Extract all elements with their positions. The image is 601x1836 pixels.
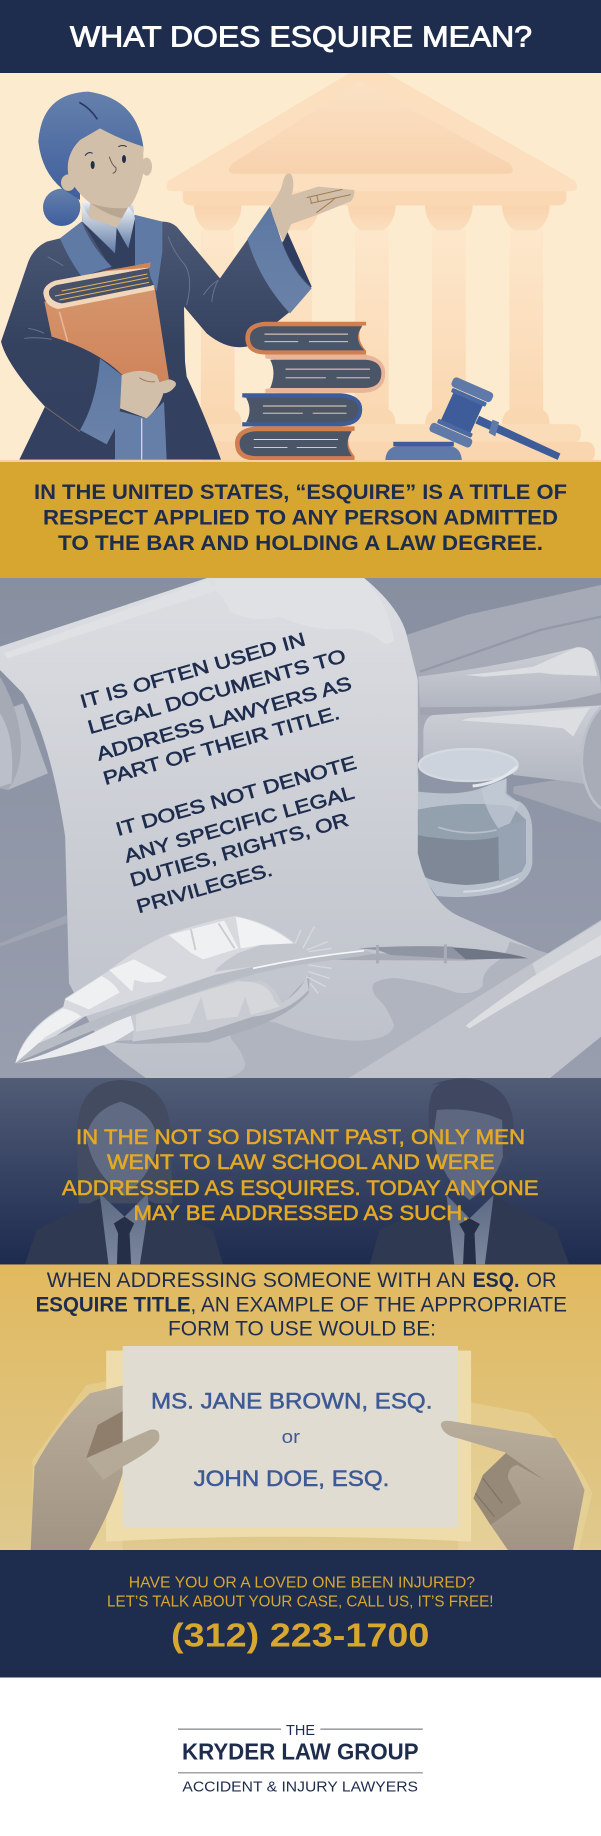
panel: call to action bbox=[0, 1550, 601, 1678]
panel: courthouse scene with attorney bbox=[0, 62, 601, 465]
left rolled scroll bbox=[0, 677, 67, 947]
call to action text: HAVE YOU OR A LOVED ONE BEEN INJURED? bbox=[129, 1574, 475, 1591]
right hand bbox=[441, 1421, 585, 1550]
history text: ADDRESSED AS ESQUIRES. TODAY ANYONE bbox=[62, 1176, 538, 1200]
intro text: , AN EXAMPLE OF THE APPROPRIATE bbox=[190, 1294, 567, 1316]
panel: history of the title bbox=[0, 1078, 601, 1265]
background scrolls and ink bottle bbox=[407, 585, 601, 897]
hand glow and back paper bbox=[33, 1351, 592, 1550]
courthouse bbox=[166, 62, 595, 462]
parchment text, rotated bbox=[78, 629, 359, 918]
left hand bbox=[31, 1385, 125, 1550]
statement text: TO THE BAR AND HOLDING A LAW DEGREE. bbox=[58, 531, 543, 555]
parchment text, rotated: DUTIES, RIGHTS, OR bbox=[128, 810, 351, 892]
book held by attorney bbox=[43, 263, 169, 382]
intro text: ESQUIRE TITLE bbox=[36, 1294, 190, 1316]
note card bbox=[123, 1346, 458, 1528]
parchment text, rotated: PART OF THEIR TITLE. bbox=[101, 703, 342, 790]
parchment text, rotated: IT DOES NOT DENOTE bbox=[114, 753, 359, 841]
attorney figure bbox=[1, 92, 354, 460]
example names: MS. JANE BROWN, ESQ. bbox=[151, 1388, 432, 1413]
statement text: RESPECT APPLIED TO ANY PERSON ADMITTED bbox=[43, 506, 558, 530]
logo: The Kryder Law Group: ACCIDENT & INJURY LAWYERS bbox=[182, 1780, 418, 1796]
attorney lower arm and hand bbox=[80, 358, 176, 460]
header banner bbox=[0, 0, 601, 73]
parchment text, rotated: LEGAL DOCUMENTS TO bbox=[86, 646, 348, 739]
stack of books bbox=[235, 322, 385, 461]
foreground scroll and paper shading bbox=[226, 920, 601, 1078]
history text: IN THE NOT SO DISTANT PAST, ONLY MEN bbox=[76, 1125, 525, 1149]
title: WHAT DOES ESQUIRE MEAN? bbox=[70, 22, 532, 54]
call to action text: LET’S TALK ABOUT YOUR CASE, CALL US, IT’S FREE! bbox=[107, 1593, 494, 1610]
example names: JOHN DOE, ESQ. bbox=[194, 1466, 389, 1491]
example names bbox=[151, 1388, 432, 1491]
phone number: (312) 223-1700 bbox=[171, 1617, 429, 1654]
intro text: WHEN ADDRESSING SOMEONE WITH AN bbox=[47, 1269, 466, 1292]
example names: or bbox=[282, 1426, 300, 1447]
panel: how to address someone bbox=[0, 1264, 601, 1550]
statement text: IN THE UNITED STATES, “ESQUIRE” IS A TITLE OF bbox=[34, 480, 567, 504]
silhouettes of two attorneys bbox=[0, 1078, 601, 1264]
logo: The Kryder Law Group: THE bbox=[286, 1722, 315, 1739]
parchment bbox=[0, 578, 548, 1078]
statement text bbox=[34, 480, 567, 555]
parchment text, rotated: IT IS OFTEN USED IN bbox=[78, 629, 308, 713]
intro text: ESQ. bbox=[473, 1269, 519, 1292]
panel: gold statement band bbox=[0, 460, 601, 578]
quill feather bbox=[15, 916, 528, 1063]
logo: The Kryder Law Group: KRYDER LAW GROUP bbox=[182, 1738, 419, 1764]
gavel bbox=[385, 376, 560, 462]
history text bbox=[62, 1125, 538, 1225]
history text: MAY BE ADDRESSED AS SUCH. bbox=[134, 1201, 468, 1225]
left thumb bbox=[86, 1430, 159, 1480]
history text: WENT TO LAW SCHOOL AND WERE bbox=[107, 1150, 494, 1174]
parchment text, rotated: ADDRESS LAWYERS AS bbox=[95, 674, 354, 766]
parchment text, rotated: PRIVILEGES. bbox=[134, 860, 275, 918]
logo: The Kryder Law Group bbox=[178, 1722, 423, 1796]
call to action text bbox=[107, 1574, 494, 1610]
parchment text, rotated: ANY SPECIFIC LEGAL bbox=[122, 783, 357, 868]
intro text bbox=[36, 1269, 567, 1341]
panel: scroll and quill scene bbox=[0, 578, 601, 1078]
intro text: OR bbox=[526, 1269, 556, 1292]
intro text: FORM TO USE WOULD BE: bbox=[168, 1318, 436, 1341]
